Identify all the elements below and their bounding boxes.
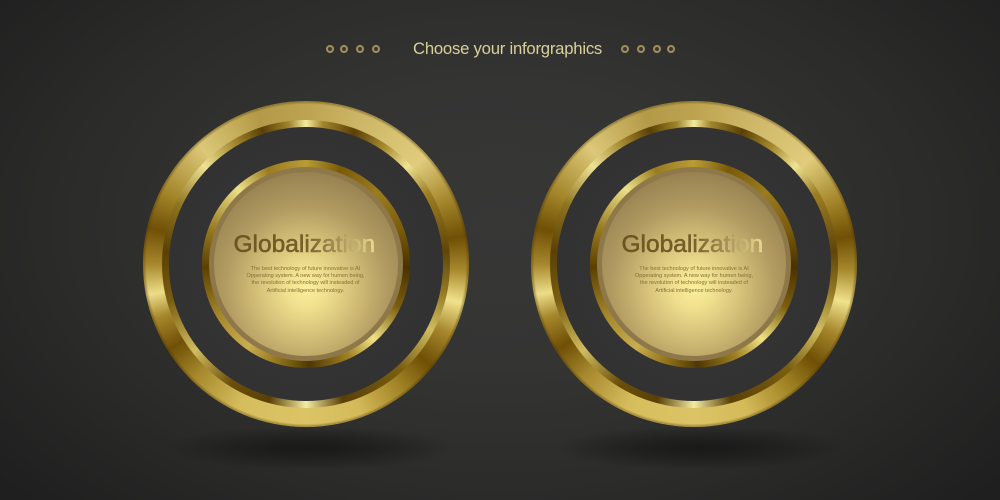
panel: right gold ring <box>531 101 857 427</box>
panel: left gold ring <box>143 101 469 427</box>
heading: Choose your inforgraphics: Choose your inforgraphics <box>413 39 602 58</box>
center gold disc: left <box>202 160 410 368</box>
text block: right description: The best technology of future innovative is AI <box>639 266 749 272</box>
title row <box>326 39 675 58</box>
text block: left description: Opperating system. A new way for humen being, <box>246 273 364 279</box>
dots: left <box>326 45 380 53</box>
center gold disc: right <box>590 160 798 368</box>
text block: left description: the revolution of technology will insteaded of <box>252 280 359 286</box>
heading: Globalization left: Globalization <box>233 231 375 258</box>
text block: right description: Opperating system. A new way for humen being, <box>635 273 753 279</box>
text block: right description: the revolution of technology will insteaded of <box>640 280 748 286</box>
dots: right <box>621 45 675 53</box>
heading: Globalization right: Globalization <box>622 231 763 258</box>
text block: left description: The best technology of future innovative is AI <box>251 266 360 272</box>
text block: right description: Artificial intelligence technology. <box>655 288 733 294</box>
shadow: right ring <box>554 426 844 470</box>
shadow: left ring <box>165 426 455 470</box>
text block: left description <box>246 266 364 294</box>
text block: right description <box>635 266 753 294</box>
text block: left description: Artificial intelligence technology. <box>267 288 344 294</box>
